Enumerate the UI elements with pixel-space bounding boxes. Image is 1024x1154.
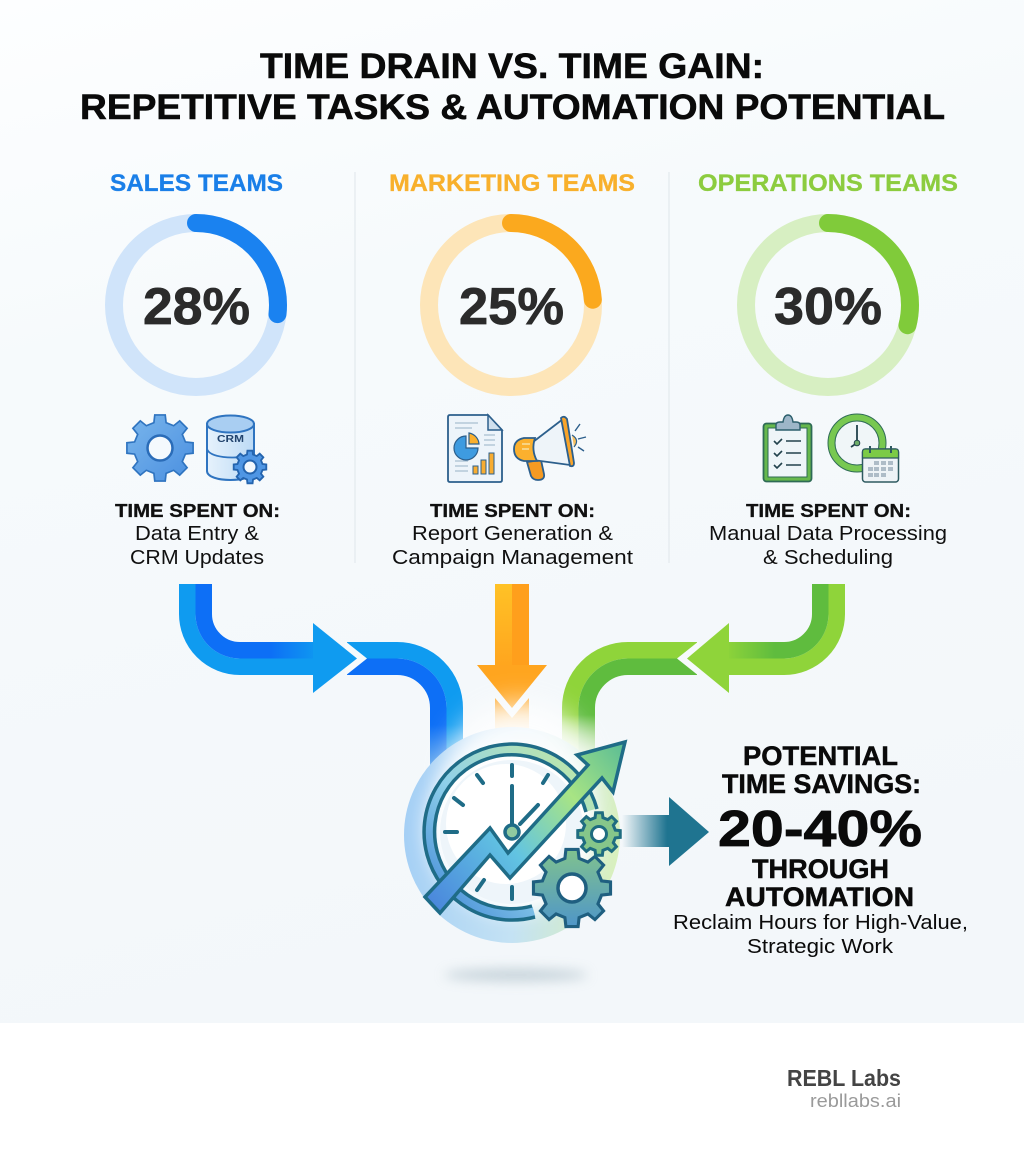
footer brand: rebllabs.ai	[810, 1091, 901, 1111]
callout: potential time savings: Reclaim Hours for High-Value,	[673, 912, 968, 934]
text: time spent on, sales: CRM Updates	[130, 547, 264, 569]
panel: sales teams	[110, 170, 283, 569]
title: TIME DRAIN VS. TIME GAIN:	[260, 47, 764, 86]
footer brand: REBL Labs	[787, 1065, 901, 1091]
text: time spent on, marketing: Report Generation &	[412, 523, 614, 545]
text: time spent on, marketing	[392, 500, 633, 569]
callout: potential time savings: TIME SAVINGS:	[722, 769, 921, 799]
text: time spent on, operations: Manual Data Processing	[709, 523, 947, 545]
title	[80, 47, 945, 127]
donut chart: 28%: 28%	[143, 278, 250, 336]
icon: report document	[448, 415, 502, 482]
icon: clock hub with rising arrow and gears	[404, 703, 625, 943]
text: time spent on, marketing: TIME SPENT ON:	[430, 500, 595, 521]
shadow under hub	[444, 969, 588, 981]
icon: CRM database	[207, 416, 266, 483]
panel: operations teams	[698, 170, 958, 569]
heading: sales teams: SALES TEAMS	[110, 170, 283, 197]
donut chart: 25%	[429, 223, 593, 387]
text: time spent on, marketing: Campaign Management	[392, 547, 633, 569]
big number: 20-40%	[718, 800, 922, 857]
callout: potential time savings: POTENTIAL	[743, 741, 898, 771]
arrow: marketing flow	[477, 584, 547, 748]
donut chart: 25%: 25%	[459, 278, 564, 336]
text: time spent on, operations: TIME SPENT ON:	[746, 500, 911, 521]
heading: operations teams: OPERATIONS TEAMS	[698, 170, 958, 197]
callout: potential time savings: THROUGH	[752, 854, 889, 884]
icon: gear	[127, 415, 193, 481]
text: time spent on, sales	[115, 500, 280, 569]
heading: marketing teams: MARKETING TEAMS	[389, 170, 635, 197]
callout: potential time savings: AUTOMATION	[725, 882, 914, 912]
text: time spent on, operations	[709, 500, 947, 569]
icon: clock and calendar	[828, 414, 898, 482]
donut chart: 30%	[746, 223, 910, 387]
arrow: sales flow	[187, 584, 455, 785]
callout: potential time savings: Strategic Work	[747, 936, 894, 958]
icon: clipboard checklist	[764, 415, 812, 482]
icon: megaphone	[514, 417, 586, 480]
donut chart: 30%: 30%	[774, 278, 882, 336]
title: REPETITIVE TASKS & AUTOMATION POTENTIAL	[80, 88, 945, 127]
text: time spent on, operations: & Scheduling	[763, 547, 893, 569]
text: time spent on, sales: Data Entry &	[135, 523, 260, 545]
icon: CRM database: CRM	[217, 433, 244, 445]
text: time spent on, sales: TIME SPENT ON:	[115, 500, 280, 521]
arrow: operations flow	[570, 584, 837, 760]
donut chart: 28%	[114, 223, 278, 387]
arrow: hub to result	[622, 797, 709, 866]
panel: marketing teams	[389, 170, 635, 569]
callout: potential time savings	[673, 741, 968, 958]
footer brand	[787, 1065, 901, 1111]
